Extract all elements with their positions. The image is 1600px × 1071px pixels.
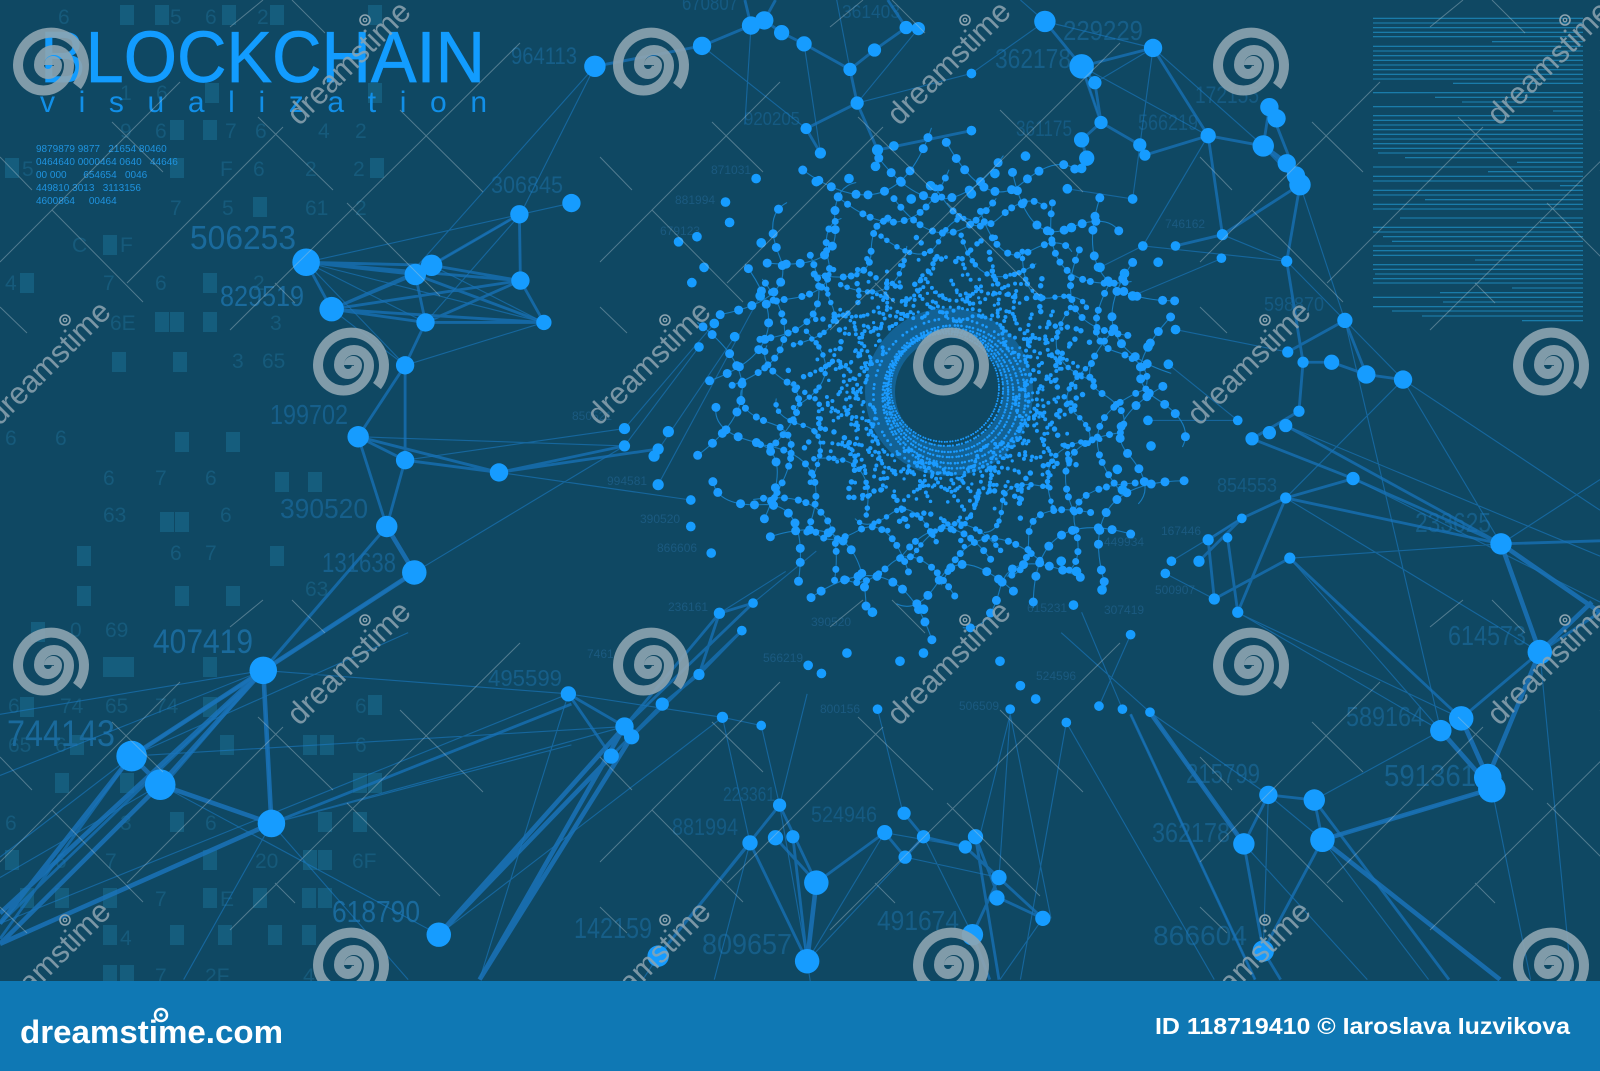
number labels: 566219 [1138,110,1198,135]
hex code backdrop: 6E [110,312,136,335]
number labels: 131638 [322,547,396,578]
number labels: 390520 [811,615,851,629]
hex code backdrop: 69 [105,619,128,642]
number labels: 591361 [1384,758,1476,793]
hex code backdrop: 2 [253,272,265,295]
hex code backdrop: 6 [5,427,17,450]
hex code backdrop: 6 [205,812,217,835]
number labels: 850521 [572,409,612,423]
small nodes [624,129,1303,717]
number labels: 598870 [1264,294,1324,316]
number labels: 809657 [702,929,792,961]
hex code backdrop: 63 [103,504,126,527]
hex code backdrop: 6 [55,427,67,450]
hex code backdrop: 6 [220,504,232,527]
hex code backdrop: 3 [120,812,132,835]
striped data panel [1373,18,1583,321]
image credit: ID 118719410 © Iaroslava Iuzvikova [1155,1013,1570,1039]
footer logo: dreamstime.com [20,1014,283,1050]
footer band [0,981,1600,1071]
small data text block: 0464640 0000464 0640 44646 [36,157,178,168]
hex code backdrop: 6 [5,812,17,835]
hex code backdrop: 5 [22,158,34,181]
number labels: 994581 [607,474,647,488]
hex code backdrop: 63 [305,578,328,601]
number labels: 871031 [711,163,751,177]
watermark text: dreamstime [880,594,1018,732]
number labels: 495599 [488,665,562,691]
hex code backdrop: 2 [257,6,269,29]
hex code backdrop: 20 [255,850,278,873]
small data text block: 4600864 00464 [36,196,117,207]
number labels: 142159 [574,913,652,945]
hex code backdrop: 6 [170,542,182,565]
hex code backdrop: F [120,234,133,257]
hex code backdrop: 9 [120,120,132,143]
number labels: 407419 [153,623,253,661]
small data text block: 9879879 9877 21654 80460 [36,144,167,155]
hex code backdrop: 7 [155,888,167,911]
number labels: 215799 [1186,758,1260,789]
hex code backdrop: 4 [120,927,132,950]
hex code backdrop: 4 [303,965,315,988]
number labels: 920205 [744,109,800,129]
hex code backdrop [5,5,384,988]
hex code backdrop: 6 [205,6,217,29]
number labels: 964113 [511,43,577,70]
hex code backdrop: F [220,158,233,181]
tier 1 nodes [810,246,1095,532]
hex code backdrop: 6 [58,6,70,29]
number labels: 449934 [1104,535,1144,549]
hex code backdrop: 2 [355,197,367,220]
hex code backdrop: 4 [318,120,330,143]
number labels: 172155 [1195,82,1259,109]
watermark text: dreamstime [280,594,418,732]
hex code backdrop: 74 [155,695,179,718]
number labels: 854553 [1217,475,1277,497]
number labels: 229229 [1063,15,1143,46]
hex code backdrop: 61 [305,197,328,220]
number labels: 524596 [1036,669,1076,683]
hex code backdrop: 7 [155,965,167,988]
hex code backdrop: 5 [222,197,234,220]
number labels: 618790 [332,894,420,929]
hex code backdrop: 6 [355,695,367,718]
number labels: 306845 [491,172,563,199]
hex code backdrop: 0 [70,619,82,642]
hex code backdrop: 7 [105,850,117,873]
hex code backdrop: 7 [205,542,217,565]
hex code backdrop: 1 [120,82,132,105]
hex code backdrop: 2 [353,158,365,181]
hex code backdrop: 6 [155,272,167,295]
tier 3 nodes [711,152,1171,625]
hex code backdrop: 7 [170,197,182,220]
watermark text: dreamstime [1180,294,1318,432]
hex code backdrop: 7 [103,272,115,295]
small data text block: 00 000 654654 0046 [36,170,148,181]
number labels: 566219 [763,651,803,665]
number labels: 7461 [587,647,614,661]
network: thick connection lines [0,146,1600,980]
number labels: 500907 [1155,583,1195,597]
number labels: 744143 [7,713,115,754]
hex code backdrop: 65 [8,734,31,757]
number labels: 233625 [1415,507,1491,538]
number labels: 390520 [280,493,368,524]
central vortex: dense ring [814,257,1076,518]
hex code backdrop: C [72,234,87,257]
number labels: 589164 [1346,701,1424,732]
hex code backdrop: 2F [205,965,230,988]
number labels: 524946 [811,802,877,827]
hex code backdrop: 6 [255,120,267,143]
thin chain links [660,92,1227,674]
central vortex: outer scalloped node chains [660,92,1227,674]
hex code backdrop: 3 [270,312,282,335]
medium nodes [544,33,1345,918]
number labels: 866606 [657,541,697,555]
subtitle: visualization [40,86,487,119]
tier 2 nodes [757,200,1119,571]
number labels: 881994 [672,814,738,841]
hex code backdrop: 6 [55,734,67,757]
hex code backdrop: 6 [253,158,265,181]
hex code backdrop: 6F [352,850,377,873]
number labels: 506509 [959,699,999,713]
number labels: 491674 [877,905,959,936]
number labels: 829519 [220,281,304,313]
number labels: 800156 [820,702,860,716]
hex code backdrop: 7 [155,467,167,490]
number labels: 390520 [640,512,680,526]
hex code backdrop: 6 [205,467,217,490]
number labels: 199702 [270,399,348,430]
hex code backdrop: 3 [232,350,244,373]
hex code backdrop: 65 [262,350,285,373]
tier 4 nodes [660,92,1227,674]
small data text block: 449810 3013 3113156 [36,183,141,194]
hex code backdrop: 6 [103,467,115,490]
small data text block [36,144,178,207]
number labels: 223361 [723,784,775,806]
hex code backdrop: 6 [155,120,167,143]
central vortex: soft glow under the dense ring [880,323,1018,461]
watermark text: dreamstime [580,294,718,432]
hex code backdrop: 6 [355,734,367,757]
hex code backdrop: 2 [305,158,317,181]
hex code backdrop: 65 [105,695,128,718]
number labels: 614573 [1448,620,1526,651]
number labels: 679123 [660,224,700,238]
number labels: 362178 [995,43,1071,74]
hex code backdrop: 7 [225,120,237,143]
number labels: 866604 [1153,920,1247,951]
number labels: 746162 [1165,217,1205,231]
hex code backdrop: 6 [156,82,168,105]
number labels: 361175 [1016,116,1072,141]
network nodes [132,20,1540,961]
number labels: 307419 [1104,603,1144,617]
hex code backdrop: E [220,888,234,911]
number labels: 615231 [1027,601,1067,615]
number labels: 362178 [1152,817,1230,848]
large nodes [132,756,160,785]
watermark text: dreamstime [580,894,718,1032]
number labels: 506253 [190,219,296,256]
title: BLOCKCHAIN [40,18,485,98]
hex code backdrop: 5 [170,6,182,29]
watermark text: dreamstime [1180,894,1318,1032]
hex code backdrop: 4 [5,272,17,295]
hex code backdrop: 74 [60,695,84,718]
number labels: 361403 [842,2,900,22]
hex code backdrop: 6 [8,695,20,718]
number labels: 881994 [675,193,715,207]
hex code backdrop: 6 [55,850,67,873]
number labels: 167446 [1161,524,1201,538]
number labels: 236161 [668,600,708,614]
hex code backdrop: 2 [355,120,367,143]
